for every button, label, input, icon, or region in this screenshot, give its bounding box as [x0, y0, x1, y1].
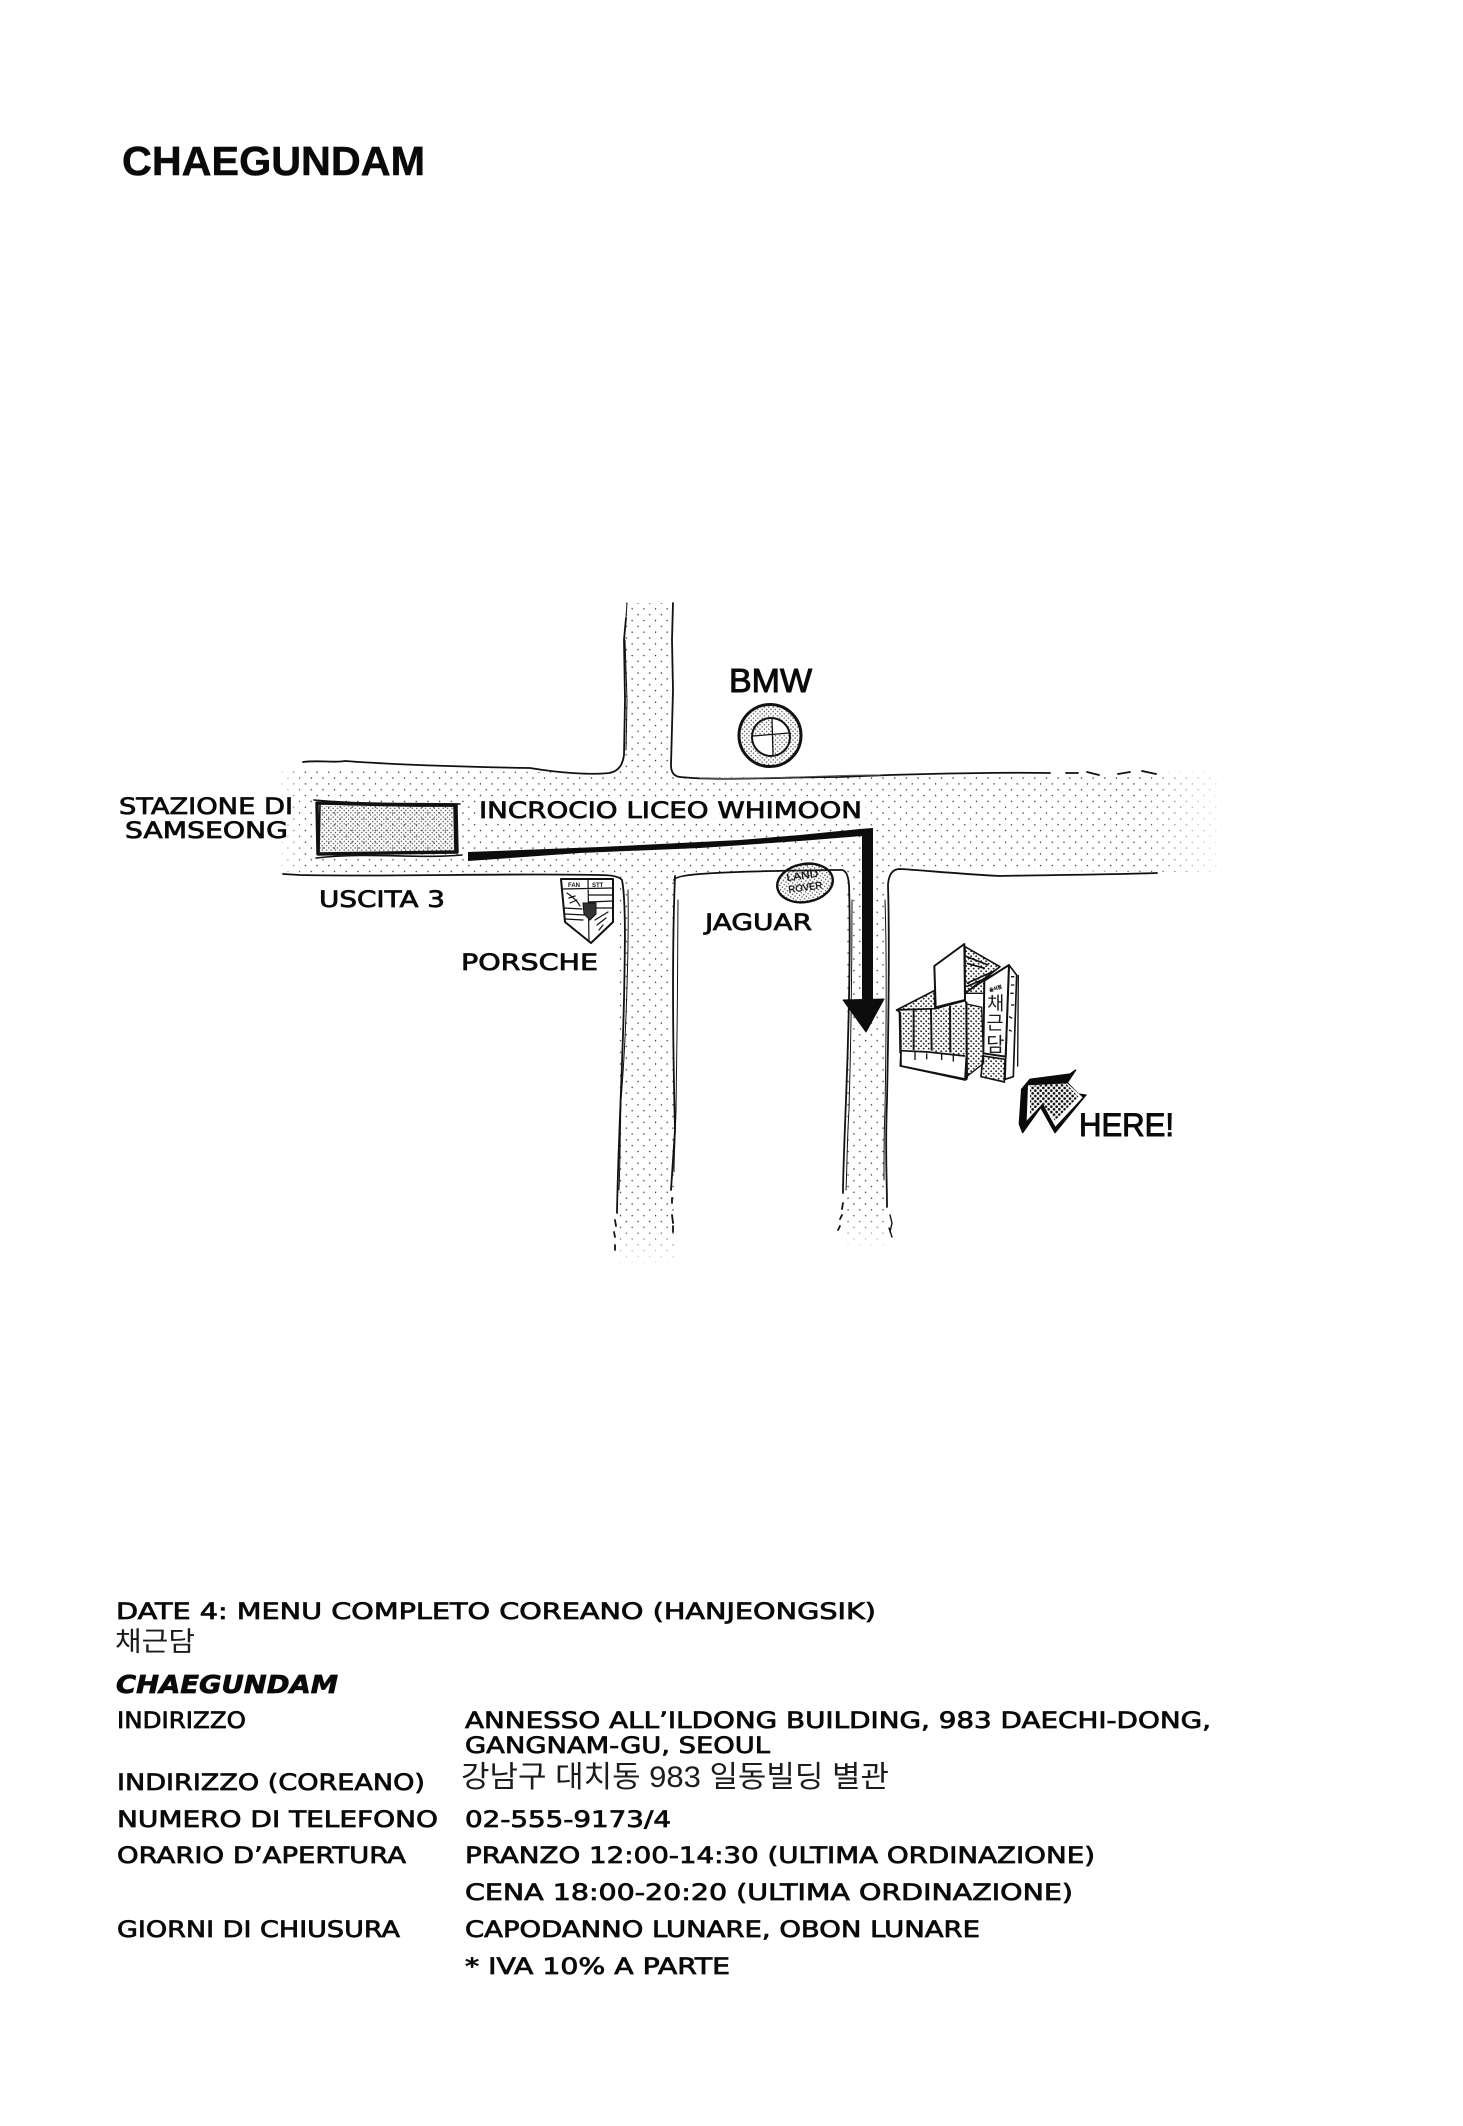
icon: restaurant building: 근 — [986, 1012, 1004, 1033]
closing days — [117, 1917, 980, 1943]
opening hours: CENA 18:00-20:20 (ULTIMA ORDINAZIONE) — [465, 1880, 1073, 1906]
address: ANNESSO ALL’ILDONG BUILDING, 983 DAECHI-DONG, — [465, 1708, 1211, 1734]
icon: restaurant building: 음식점 — [988, 983, 1003, 994]
closing days: CAPODANNO LUNARE, OBON LUNARE — [465, 1917, 980, 1943]
icon: restaurant building: 채 — [987, 993, 1004, 1014]
label: stazione di samseong: SAMSEONG — [125, 818, 288, 844]
phone: NUMERO DI TELEFONO — [117, 1807, 438, 1833]
roads — [276, 603, 1242, 1267]
vat note: * IVA 10% A PARTE — [465, 1954, 730, 1980]
korean address — [117, 1761, 889, 1796]
opening hours: PRANZO 12:00-14:30 (ULTIMA ORDINAZIONE) — [465, 1843, 1095, 1869]
address: GANGNAM-GU, SEOUL — [465, 1733, 771, 1759]
phone — [117, 1807, 671, 1833]
label: stazione di samseong — [119, 794, 293, 844]
opening hours: ORARIO D’APERTURA — [117, 1843, 407, 1869]
icon: Porsche shield: STT — [592, 883, 604, 889]
heading: date 4: DATE 4: MENU COMPLETO COREANO (HANJEONGSIK) — [116, 1599, 876, 1625]
label: INCROCIO LICEO WHIMOON: INCROCIO LICEO WHIMOON — [479, 798, 862, 824]
label: BMW: BMW — [729, 662, 813, 699]
icon: Land Rover badge: ROVER — [788, 880, 823, 896]
icon: restaurant building — [897, 944, 1018, 1082]
icon: Porsche shield: FAN — [568, 883, 580, 889]
address — [117, 1708, 1211, 1759]
label: uscita 3: USCITA 3 — [319, 887, 445, 913]
phone: 02-555-9173/4 — [465, 1807, 671, 1833]
address: INDIRIZZO — [117, 1708, 246, 1734]
icon: Porsche shield — [561, 879, 613, 943]
info panel — [115, 1599, 1211, 1980]
closing days: GIORNI DI CHIUSURA — [117, 1917, 401, 1943]
route arrow — [468, 828, 884, 1032]
korean address: 강남구 대치동 983 일동빌딩 별관 — [461, 1761, 889, 1794]
label: jaguar: JAGUAR — [703, 910, 812, 936]
opening hours — [117, 1843, 1095, 1906]
icon: Land Rover badge — [774, 859, 836, 907]
restaurant name: CHAEGUNDAM — [116, 1670, 338, 1699]
korean name: 채근담 — [115, 1627, 195, 1657]
label: stazione di samseong: STAZIONE DI — [119, 794, 293, 820]
label: porsche: PORSCHE — [461, 950, 598, 976]
icon: BMW logo — [739, 704, 801, 766]
icon: Land Rover badge: LAND — [786, 869, 819, 884]
station block — [314, 800, 462, 858]
icon: here arrow — [1019, 1070, 1086, 1133]
korean address: INDIRIZZO (COREANO) — [117, 1770, 425, 1796]
title: CHAEGUNDAM — [122, 138, 425, 184]
label: here: HERE! — [1079, 1107, 1174, 1143]
icon: restaurant building: 담 — [986, 1033, 1005, 1056]
map — [119, 603, 1242, 1267]
